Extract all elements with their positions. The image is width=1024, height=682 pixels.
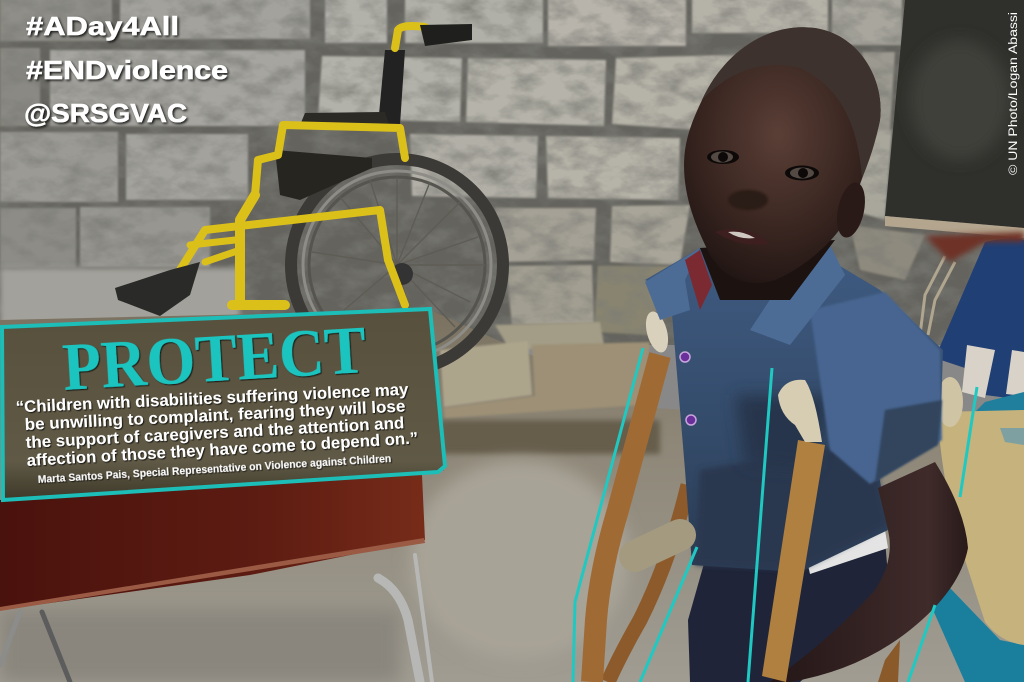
boy: shorts (688, 540, 890, 682)
quote text: “Children with disabilities suffering violence may (15, 381, 410, 416)
boy: sleeve (810, 292, 942, 484)
blue chair and shelf (920, 232, 1024, 412)
background: floor (0, 310, 1024, 682)
blackboard (885, 0, 1024, 238)
hashtag: A Day 4 All: #ADay4All (26, 11, 179, 41)
boy: hair (702, 27, 881, 178)
crutch: left top pad (642, 309, 672, 355)
quote text: the support of caregivers and the attention and (25, 414, 405, 452)
crutch: right top pad (778, 380, 822, 442)
wheelchair: large wheel (291, 159, 503, 371)
panel: olive background with teal border (2, 309, 445, 500)
hashtags (24, 11, 228, 128)
hashtag: END violence: #ENDviolence (26, 55, 228, 85)
boy: purple buttons (680, 352, 696, 425)
wheelchair (115, 24, 503, 371)
heading: PROTECT: PROTECT (60, 311, 368, 405)
table (933, 410, 1024, 682)
crutch: right far pad (937, 377, 963, 427)
wooden pallet (440, 322, 650, 418)
wheelchair: yellow frame (180, 26, 425, 305)
wheelchair: footrest (115, 262, 200, 316)
boy: ear (832, 180, 870, 240)
teal accent lines (573, 348, 977, 682)
crutch: left front rail (592, 355, 660, 682)
boy: eyes (707, 150, 819, 180)
quote text: affection of those they have come to depend on.” (26, 429, 419, 470)
red desk (0, 470, 445, 682)
crutch: left rear leg (608, 485, 688, 682)
crutch: left hand grip (635, 535, 680, 556)
desk: chrome legs (0, 555, 432, 682)
quote text: be unwilling to complaint, fearing they will lose (24, 397, 406, 434)
boy: collar (645, 245, 845, 345)
boy (645, 27, 968, 682)
boy: nose (728, 190, 768, 210)
attribution: Marta Santos Pais, Special Representative on Violence against Children (37, 453, 392, 486)
background: brick wall (0, 0, 1024, 345)
caption panel (2, 309, 445, 500)
boy: shirt body (645, 248, 943, 572)
copyright credit: © UN Photo/Logan Abassi (1008, 12, 1020, 175)
crutches behind boy (592, 309, 963, 682)
quote text (15, 381, 419, 470)
crutch: right lower rail (878, 640, 900, 682)
boy: neck (700, 240, 835, 300)
crutches in front (635, 380, 825, 682)
crutch: right shaft (762, 440, 825, 682)
boy: right arm (770, 462, 968, 682)
boy: white waistband (808, 530, 888, 574)
boy: shirt lower shadow (695, 440, 888, 570)
handle: SRSG VAC: @SRSGVAC (24, 98, 187, 128)
wheelchair: seat and backrest (275, 150, 372, 200)
boy: mouth (715, 229, 770, 245)
boy: head (684, 27, 881, 283)
